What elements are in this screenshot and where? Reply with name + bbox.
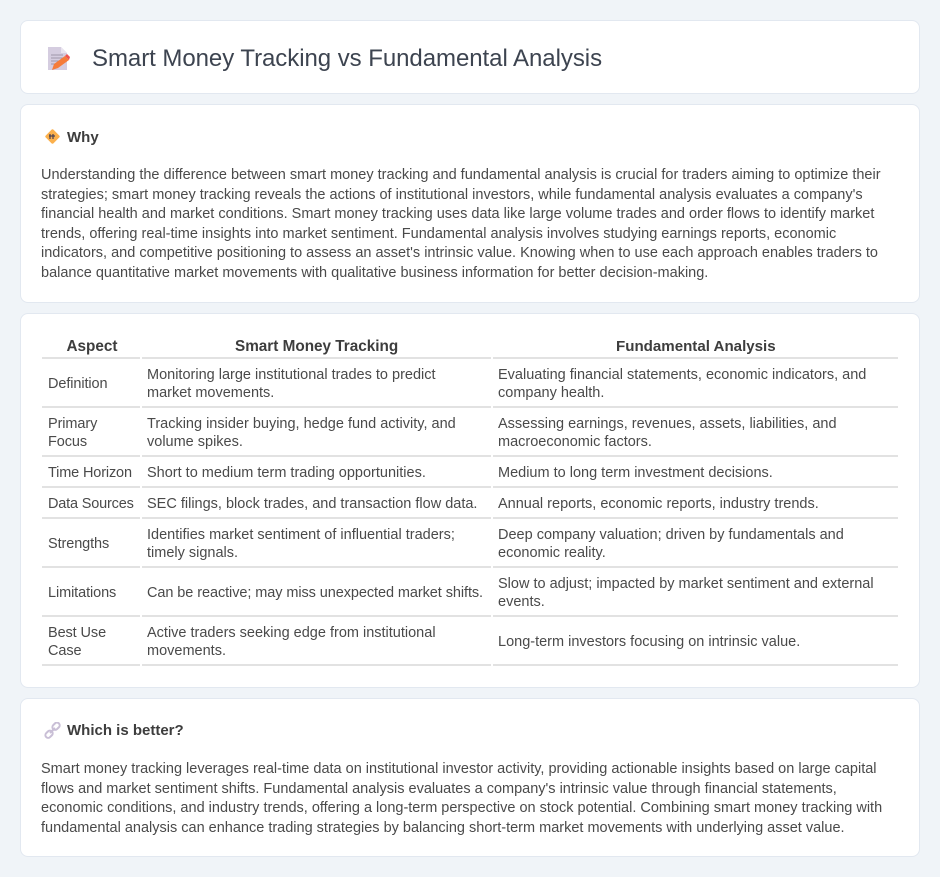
row: strengths: timely signals. [147, 545, 238, 561]
icon: warning diamond [45, 129, 60, 144]
row: strengths: Identifies market sentiment of influential traders; [147, 527, 455, 543]
row: definition: company health. [498, 385, 604, 401]
row: limitations: events. [498, 594, 545, 610]
heading: why: Why [67, 129, 99, 146]
panel: which is better [20, 698, 920, 857]
row: primary focus: Tracking insider buying, hedge fund activity, and [147, 416, 456, 432]
text block: why: indicators, and competitive positioning to assess an asset's intrinsic value. Knowing when to use each approach enables traders to [41, 245, 878, 261]
row: time horizon [48, 465, 773, 481]
text block: why [41, 167, 881, 281]
row: primary focus: Focus [48, 434, 87, 450]
row: definition: Definition [48, 376, 107, 392]
row: primary focus: macroeconomic factors. [498, 434, 652, 450]
row: time horizon: Medium to long term investment decisions. [498, 465, 773, 481]
panel: title card [20, 20, 920, 94]
table header: Aspect [66, 338, 118, 355]
row: strengths: Deep company valuation; driven by fundamentals and [498, 527, 844, 543]
text block: which is better [41, 761, 882, 836]
row: strengths: Strengths [48, 536, 109, 552]
row: data sources: Data Sources [48, 496, 134, 512]
row: best use case: Long-term investors focusing on intrinsic value. [498, 634, 800, 650]
panel: comparison table [20, 313, 920, 688]
row: primary focus: Primary [48, 416, 97, 432]
text block: why: Understanding the difference between smart money tracking and fundamental analysis is crucial for traders aiming to optimize their [41, 167, 881, 183]
row: primary focus [48, 416, 837, 450]
table header [66, 338, 776, 355]
row: best use case [48, 625, 800, 659]
row: strengths [48, 527, 844, 561]
row: data sources: Annual reports, economic reports, industry trends. [498, 496, 819, 512]
title: Smart Money Tracking vs Fundamental Analysis [92, 45, 602, 72]
text block: why: trends, offering real-time insights into market sentiment. Fundamental analysis involves studying earnings reports, economic [41, 226, 836, 242]
row: limitations: Limitations [48, 585, 116, 601]
row: definition [48, 367, 866, 401]
row: best use case: Case [48, 643, 81, 659]
text block: which is better: Smart money tracking leverages real-time data on institutional investor activity, providing actionable insights based on large capital [41, 761, 877, 777]
text block: why: financial health and market conditions. Smart money tracking uses data like large volume trades and order flows to identify market [41, 206, 874, 222]
icon: document with pencil [48, 47, 70, 70]
row: best use case: movements. [147, 643, 226, 659]
icon: chain link [44, 722, 61, 739]
text block: which is better: flows and market sentiment shifts. Fundamental analysis evaluates a company's intrinsic value through financial statements, [41, 781, 837, 797]
row: limitations: Can be reactive; may miss unexpected market shifts. [147, 585, 483, 601]
text block: why: strategies; smart money tracking reveals the actions of institutional investors, while fundamental analysis evaluates a company's [41, 187, 863, 203]
row: definition: Monitoring large institutional trades to predict [147, 367, 436, 383]
row: primary focus: Assessing earnings, revenues, assets, liabilities, and [498, 416, 837, 432]
row: best use case: Best Use [48, 625, 106, 641]
row: time horizon: Time Horizon [48, 465, 132, 481]
row: data sources [48, 496, 819, 512]
row: limitations: Slow to adjust; impacted by market sentiment and external [498, 576, 874, 592]
row: data sources: SEC filings, block trades, and transaction flow data. [147, 496, 477, 512]
row: strengths: economic reality. [498, 545, 606, 561]
table header: Smart Money Tracking [235, 338, 398, 355]
table header: Fundamental Analysis [616, 338, 776, 355]
text block: which is better: fundamental analysis can enhance trading strategies by balancing short-term market movements with underlying asset value. [41, 820, 845, 836]
text block: which is better: economic conditions, and industry trends, offering a long-term perspective on stock potential. Combining smart money tracking with [41, 800, 882, 816]
comparison table [42, 338, 898, 666]
panel: why [20, 104, 920, 303]
text block: why: balance quantitative market movements with qualitative business information for better decision-making. [41, 265, 708, 281]
heading: which is better: Which is better? [67, 722, 184, 739]
row: definition: market movements. [147, 385, 274, 401]
row: time horizon: Short to medium term trading opportunities. [147, 465, 426, 481]
row: primary focus: volume spikes. [147, 434, 243, 450]
row: best use case: Active traders seeking edge from institutional [147, 625, 436, 641]
row: limitations [48, 576, 874, 610]
row: definition: Evaluating financial statements, economic indicators, and [498, 367, 866, 383]
